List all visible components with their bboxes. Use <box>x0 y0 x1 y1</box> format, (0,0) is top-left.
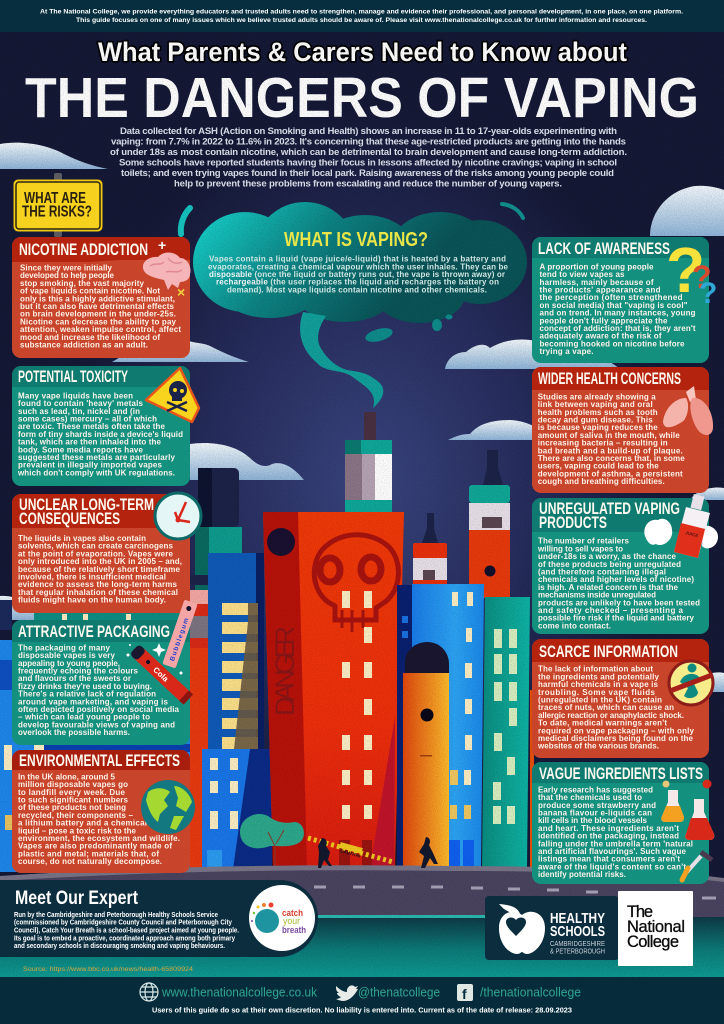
body text: on brain development in the under-25s. <box>20 310 176 319</box>
icon: vape bottle with vapour clouds <box>644 494 718 558</box>
body text: There's a relative lack of regulation <box>18 690 156 699</box>
body text: Run by the Cambridgeshire and Peterborough Healthy Schools Service <box>14 912 218 919</box>
heading: what is vaping: WHAT IS VAPING? <box>284 229 428 251</box>
text: what is vaping explanation: evaporates, creating a chemical vapour which the user inhales. They can be <box>208 262 509 271</box>
body text <box>20 264 181 350</box>
body text: only is this a highly addictive stimulant, <box>20 294 175 303</box>
body text: around vape marketing, and vaping is <box>18 697 169 706</box>
body text: The packaging of many <box>18 643 111 652</box>
body text: people don't fully appreciate the <box>540 316 668 325</box>
body text: developed to help people <box>20 271 115 280</box>
tree <box>240 814 304 868</box>
body text: mood and increase the likelihood of <box>20 333 160 342</box>
logo panel: healthy schools: HEALTHY <box>550 910 605 927</box>
footer: www.thenationalcollege.co.uk <box>161 984 317 1000</box>
intro paragraph: vaping: from 7.7% in 2022 to 11.6% in 2023. It's concerning that these age-restricted products are getting into the hands <box>111 137 626 148</box>
body text: Nicotine can decrease the ability to pay <box>20 317 177 326</box>
road <box>0 865 724 930</box>
body text: (and therefore containing illegal <box>538 568 666 576</box>
body text: at the point of evaporation. Vapes were <box>18 549 174 558</box>
body text <box>537 665 695 751</box>
icon: red cola vape: Cola <box>151 665 170 684</box>
icon: brain <box>143 253 191 290</box>
panel: attractive packaging <box>12 600 198 745</box>
body text: Studies are already showing a <box>538 392 656 401</box>
vapour cloud with tail <box>181 202 527 408</box>
icon: globe <box>140 983 158 1001</box>
logo panel: healthy schools: SCHOOLS <box>550 923 605 940</box>
panel: scarce information <box>532 639 713 758</box>
body text: There are also concerns that, in some <box>538 454 685 463</box>
body text: cough and breathing difficulties. <box>538 477 665 486</box>
sign: what are the risks <box>14 173 102 237</box>
body text: Early research has suggested <box>538 785 653 794</box>
panel: unclear long-term consequences <box>12 493 201 613</box>
body text: develop favourable views of vaping and <box>18 720 175 729</box>
footer <box>0 977 724 1024</box>
icon: sparkles <box>126 643 182 674</box>
body text: products are unlikely to have been tested <box>538 598 700 607</box>
body text: but it can also have detrimental effects <box>20 302 175 311</box>
body text <box>18 643 180 737</box>
body text: users, vaping could lead to the <box>538 462 659 471</box>
body text: million disposable vapes go <box>18 780 128 789</box>
body text: of these products not being <box>18 803 126 812</box>
body text: harmless, mainly because of <box>540 278 654 287</box>
body text: (unregulated in the UK) contain <box>538 696 662 704</box>
caution tape: CAUTION <box>340 848 361 859</box>
body text: – which can lead young people to <box>18 713 150 722</box>
logo panel: healthy schools: CAMBRIDGESHIRE <box>550 941 605 948</box>
logo panel: healthy schools <box>485 896 619 960</box>
heading: SCARCE INFORMATION <box>539 643 678 661</box>
body text: traces of nuts, which can cause an <box>538 703 674 712</box>
body text: listings mean that consumers aren't <box>538 855 680 864</box>
body text: that regular inhalation of these chemical <box>18 588 178 597</box>
silhouette: person left <box>318 838 332 868</box>
body text: link between vaping and oral <box>538 400 653 409</box>
body text: concept of addiction: that is, they aren't <box>540 324 696 333</box>
body text: and safety checked – presenting a <box>538 606 684 615</box>
icon: twitter bird <box>336 985 358 1001</box>
icon: sparkle and cross: × <box>177 284 185 300</box>
body text: often depicted positively on social media <box>18 705 180 714</box>
body text: of vape liquids contain nicotine. Not <box>20 287 160 296</box>
disclaimer: Users of this guide do so at their own discretion. No liability is entered into. Current as of the date of release: 28.09.2023 <box>152 1006 572 1014</box>
left red vape tower <box>188 575 210 870</box>
body text: To date, medical warnings aren't <box>538 719 667 728</box>
small middle vape <box>413 513 447 585</box>
body text: tank, which are then inhaled into the <box>18 438 162 447</box>
right edge building strip <box>530 690 534 870</box>
body text: evidence to assess the long-term harms <box>18 580 178 589</box>
panel: vague ingredients lists <box>532 762 714 884</box>
panel: environmental effects <box>12 750 195 873</box>
text: what is vaping explanation: Vapes contain a liquid (vape juice/e-liquid) that is heated by a battery and <box>209 255 506 264</box>
icon: warning triangle with skull <box>146 368 199 422</box>
body text: possible fire risk if the liquid and battery <box>538 614 695 623</box>
teal ground <box>0 915 724 977</box>
body text: development of asthma, a persistent <box>538 469 683 478</box>
heading: CONSEQUENCES <box>19 510 120 528</box>
body text: fluids might have on the human body. <box>18 596 166 605</box>
body text: to such significant numbers <box>18 796 129 804</box>
heading <box>19 496 154 528</box>
heading: NICOTINE ADDICTION <box>19 241 148 259</box>
icon: question marks: ? <box>692 259 712 295</box>
footer: /thenationalcollege <box>480 984 581 1000</box>
low blue building <box>202 749 272 869</box>
orange vape tower <box>403 642 449 868</box>
icon: flasks <box>661 780 714 840</box>
body text: and flavours of the sweets or <box>18 674 131 683</box>
body text <box>538 392 685 486</box>
body text: identify potential risks. <box>538 870 626 879</box>
text: what is vaping explanation: disposable (once the liquid or battery runs out, the vape is thrown away) or <box>209 270 505 279</box>
icon: apple <box>499 904 545 954</box>
body text <box>17 391 183 477</box>
body text: and secondary schools in discouraging smoking and vaping behaviours. <box>14 943 225 950</box>
body text: the products' appearance and <box>540 286 661 294</box>
body text: the ingredients and potentially <box>538 672 660 681</box>
icon: question marks: ? <box>666 234 705 306</box>
top information banner <box>0 0 724 32</box>
far right vape tower <box>469 450 510 598</box>
body text: health problems such as tooth <box>538 408 658 417</box>
body text: medical disclaimers being found on the <box>538 734 694 743</box>
body text <box>18 534 182 605</box>
body text: involved, there is insufficient medical <box>18 572 166 582</box>
body text: liquid – pose a toxic risk to the <box>18 826 137 835</box>
text: what is vaping explanation: demand). Most vape liquids contain nicotine and other chemicals. <box>227 286 487 295</box>
body text: Since they were initially <box>20 264 113 272</box>
body text: increasing bacteria – resulting in <box>538 439 668 448</box>
body text: prevalent in illegally imported vapes <box>18 461 163 470</box>
body text: produce some strawberry and <box>538 801 656 810</box>
body text: allergic reaction or anaphylactic shock. <box>538 711 684 720</box>
intro paragraph: Some schools have reported students having their focus in lessons affected by nicotine cravings; vaping in school <box>119 158 617 168</box>
top vape on main tower <box>345 412 392 512</box>
body text: substance addiction as an adult. <box>20 340 148 350</box>
body text: The number of retailers <box>538 537 630 546</box>
body text: bad breath and a build-up of plaque. <box>538 446 683 455</box>
icon: sparkle and cross: + <box>158 237 166 253</box>
icon: no allergens sign <box>669 661 713 705</box>
body text: the perception (often strengthened <box>540 293 683 302</box>
heading: LACK OF AWARENESS <box>538 240 670 258</box>
body text: falling under the umbrella term 'natural <box>538 839 693 848</box>
body text: which don't comply with UK regulations. <box>17 468 175 477</box>
striped blue tower <box>208 553 264 751</box>
heading: Meet Our Expert <box>15 888 139 909</box>
panel: wider health concerns <box>532 367 713 493</box>
body text: come into contact. <box>538 621 611 630</box>
panel: meet our expert <box>0 880 318 957</box>
intro paragraph: toilets; and even trying vapes found in their local park. Raising awareness of the risks among young people could <box>121 168 614 179</box>
body text: chemicals and higher levels of nicotine) <box>538 575 694 584</box>
body text: decay and gum disease. This <box>538 416 653 424</box>
body text <box>538 785 693 879</box>
body text: amount of saliva in the mouth, while <box>538 431 680 440</box>
heading: ENVIRONMENTAL EFFECTS <box>19 752 180 770</box>
body text: only introduced into the UK in 2005 – and, <box>18 557 182 566</box>
body text: such as lead, tin, nickel and (in <box>18 407 140 416</box>
dark strip and right blue tower <box>397 584 484 868</box>
icon: lungs <box>663 386 713 435</box>
body text: attention, weaken impulse control, affect <box>20 325 181 334</box>
icon: pink bubblegum vape <box>162 600 198 668</box>
body text: required on vape packaging – with only <box>538 726 695 735</box>
body text: is because vaping reduces the <box>538 423 658 432</box>
heading: POTENTIAL TOXICITY <box>18 368 128 386</box>
footer: @thenatcollege <box>358 984 440 1000</box>
body text: websites of the various brands. <box>537 742 659 751</box>
body text: solvents, which can create carcinogens <box>18 542 174 551</box>
body text: some cases) mercury – all of which <box>18 414 157 424</box>
body text: willing to sell vapes to <box>537 544 623 553</box>
logo: catch your breath <box>249 885 315 951</box>
panel: potential toxicity <box>12 366 199 486</box>
body text <box>14 912 239 950</box>
body text: environment, the ecosystem and wildlife. <box>18 834 180 843</box>
body text: trying a vape. <box>540 347 594 356</box>
body text: tend to view vapes as <box>540 270 625 279</box>
body text <box>537 537 700 630</box>
icon: facebook: f <box>462 986 467 1002</box>
teal vape tower <box>195 468 242 607</box>
logo panel: healthy schools: & PETERBOROUGH <box>550 948 605 956</box>
body text: Vapes are also predominantly made of <box>18 842 172 851</box>
buildings behind left panels <box>0 600 190 872</box>
body text: plastic and metal; materials that, of <box>18 849 159 858</box>
body text: mechanisms inside unregulated <box>538 591 656 600</box>
icon: facebook <box>457 984 473 1002</box>
body text: course, do not naturally decompose. <box>18 857 162 866</box>
body text: is high. A related concern is that the <box>538 583 679 592</box>
logo panel: the national college: The <box>627 903 653 921</box>
heading: PRODUCTS <box>539 514 607 532</box>
body text: stop smoking, the vast majority <box>20 279 145 288</box>
icon: pink bubblegum vape: Bubblegum <box>169 617 190 662</box>
body text <box>540 262 696 356</box>
main red danger tower: DANGER <box>270 626 300 716</box>
source line: Source: https://www.bbc.co.uk/news/health-65809924 <box>23 966 193 973</box>
logo: catch your breath: breath <box>282 925 306 936</box>
body text: of these products being unregulated <box>538 560 681 569</box>
title: What Parents & Carers Need to Know about <box>98 37 627 67</box>
body text: that the chemicals used to <box>538 793 642 802</box>
icon: question marks: ? <box>699 277 717 310</box>
title <box>25 37 699 130</box>
logo: catch your breath: catch <box>282 908 303 919</box>
body text: (commissioned by Cambridgeshire County Council and Peterborough City <box>14 920 232 927</box>
text: what is vaping explanation: rechargeable (the user replaces the liquid and recharges the battery on <box>216 278 499 287</box>
icon: dropper <box>682 852 712 880</box>
intro paragraph: of under 18s as most contain nicotine, which can be detrimental to brain development and cause long-term addiction. <box>110 147 627 158</box>
body text: kill cells in the blood vessels <box>538 816 648 825</box>
body text: and artificial flavourings'. Such vague <box>538 847 687 856</box>
icon: sparkle and cross <box>158 237 185 300</box>
body text: adequately aware of the risk of <box>540 332 662 341</box>
body text: disposable vapes is very <box>18 651 116 660</box>
body text: Many vape liquids have been <box>18 391 133 400</box>
body text: A proportion of young people <box>540 262 654 271</box>
body text: to landfill every week. Due <box>18 788 126 797</box>
silhouette: person right <box>419 837 438 868</box>
teal right tower <box>482 597 530 868</box>
caution tape <box>308 838 393 862</box>
top information banner: This guide focuses on one of many issues which we believe trusted adults should be aware of. Please visit www.thenationalcollege.co.uk for further information and resources. <box>76 17 647 24</box>
panel: nicotine addiction <box>12 237 191 358</box>
top information banner: At The National College, we provide everything educators and trusted adults need to strengthen, manage and evidence their professional, and personal development, in one place, on one platform. <box>40 8 683 16</box>
body text: identified on the packaging, instead <box>538 832 679 841</box>
text: what is vaping explanation <box>208 255 509 295</box>
body text: body. Some media reports have <box>18 445 144 454</box>
body text: recycled, their components – <box>18 811 134 820</box>
logo: catch your breath: your <box>283 916 300 927</box>
clouds <box>0 143 724 692</box>
panel: lack of awareness <box>532 234 717 363</box>
body text: form of tiny shards inside a device's liquid <box>18 430 183 439</box>
body text: becoming hooked on nicotine before <box>540 339 685 348</box>
intro paragraph: help to prevent these problems from escalating and reduce the number of young vapers. <box>174 178 562 189</box>
body text: The lack of information about <box>538 665 653 674</box>
body text: aware of the liquid's content so can't <box>538 862 686 871</box>
heading: UNCLEAR LONG-TERM <box>19 496 154 514</box>
body text: are toxic. These metals often take the <box>18 422 166 431</box>
body text: and heart. These ingredients aren't <box>538 824 679 833</box>
panel: unregulated vaping products <box>532 494 718 634</box>
body text: on social media) that "vaping is cool" <box>540 301 688 310</box>
body text: appealing to young people, <box>18 659 120 668</box>
graffiti skull <box>314 535 398 632</box>
body text: a lithium battery and a chemical <box>18 819 147 828</box>
logo panel: the national college <box>618 891 693 966</box>
heading: ATTRACTIVE PACKAGING <box>18 623 170 641</box>
sign: what are the risks: WHAT ARE <box>24 190 86 207</box>
sign: what are the risks: THE RISKS? <box>22 204 92 220</box>
icon: red cola vape <box>129 644 193 705</box>
body text: banana flavour e-liquids can <box>538 808 652 818</box>
body text: Its goal is to embed a proactive, coordinated approach among both primary <box>14 935 235 942</box>
body text: frequently echoing the colours <box>18 666 139 676</box>
icon: globe <box>141 780 195 834</box>
body text: suggested these metals are particularly <box>18 453 176 462</box>
intro paragraph: Data collected for ASH (Action on Smoking and Health) shows an increase in 11 to 17-year-olds experimenting with <box>120 126 617 137</box>
body text: fizzy drinks they're used to buying. <box>18 682 152 691</box>
body text: Council), Catch Your Breath is a school-based project aimed at young people. <box>14 928 239 934</box>
body text: In the UK alone, around 5 <box>18 772 116 781</box>
logo panel: the national college: National <box>627 918 685 936</box>
body text: and on trend. In many instances, young <box>540 309 696 318</box>
icon: clock with red hands <box>155 493 201 539</box>
body text: overlook the possible harms. <box>18 728 130 737</box>
logo panel: the national college: College <box>627 933 679 951</box>
main red danger tower <box>263 512 404 868</box>
body text <box>18 772 180 866</box>
body text: troubling. Some vape fluids <box>538 688 656 697</box>
body text: harmful chemicals in a vape is <box>538 680 659 689</box>
body text: The liquids in vapes also contain <box>18 534 146 543</box>
body text: because of the relatively short timeframe <box>18 565 181 574</box>
body text: under-18s is a worry, as the chance <box>538 552 677 561</box>
heading <box>539 500 680 532</box>
body text: found to contain 'heavy' metals <box>18 399 144 408</box>
icon: vape bottle with vapour clouds: JUICE <box>685 530 699 538</box>
intro paragraph <box>110 126 627 189</box>
